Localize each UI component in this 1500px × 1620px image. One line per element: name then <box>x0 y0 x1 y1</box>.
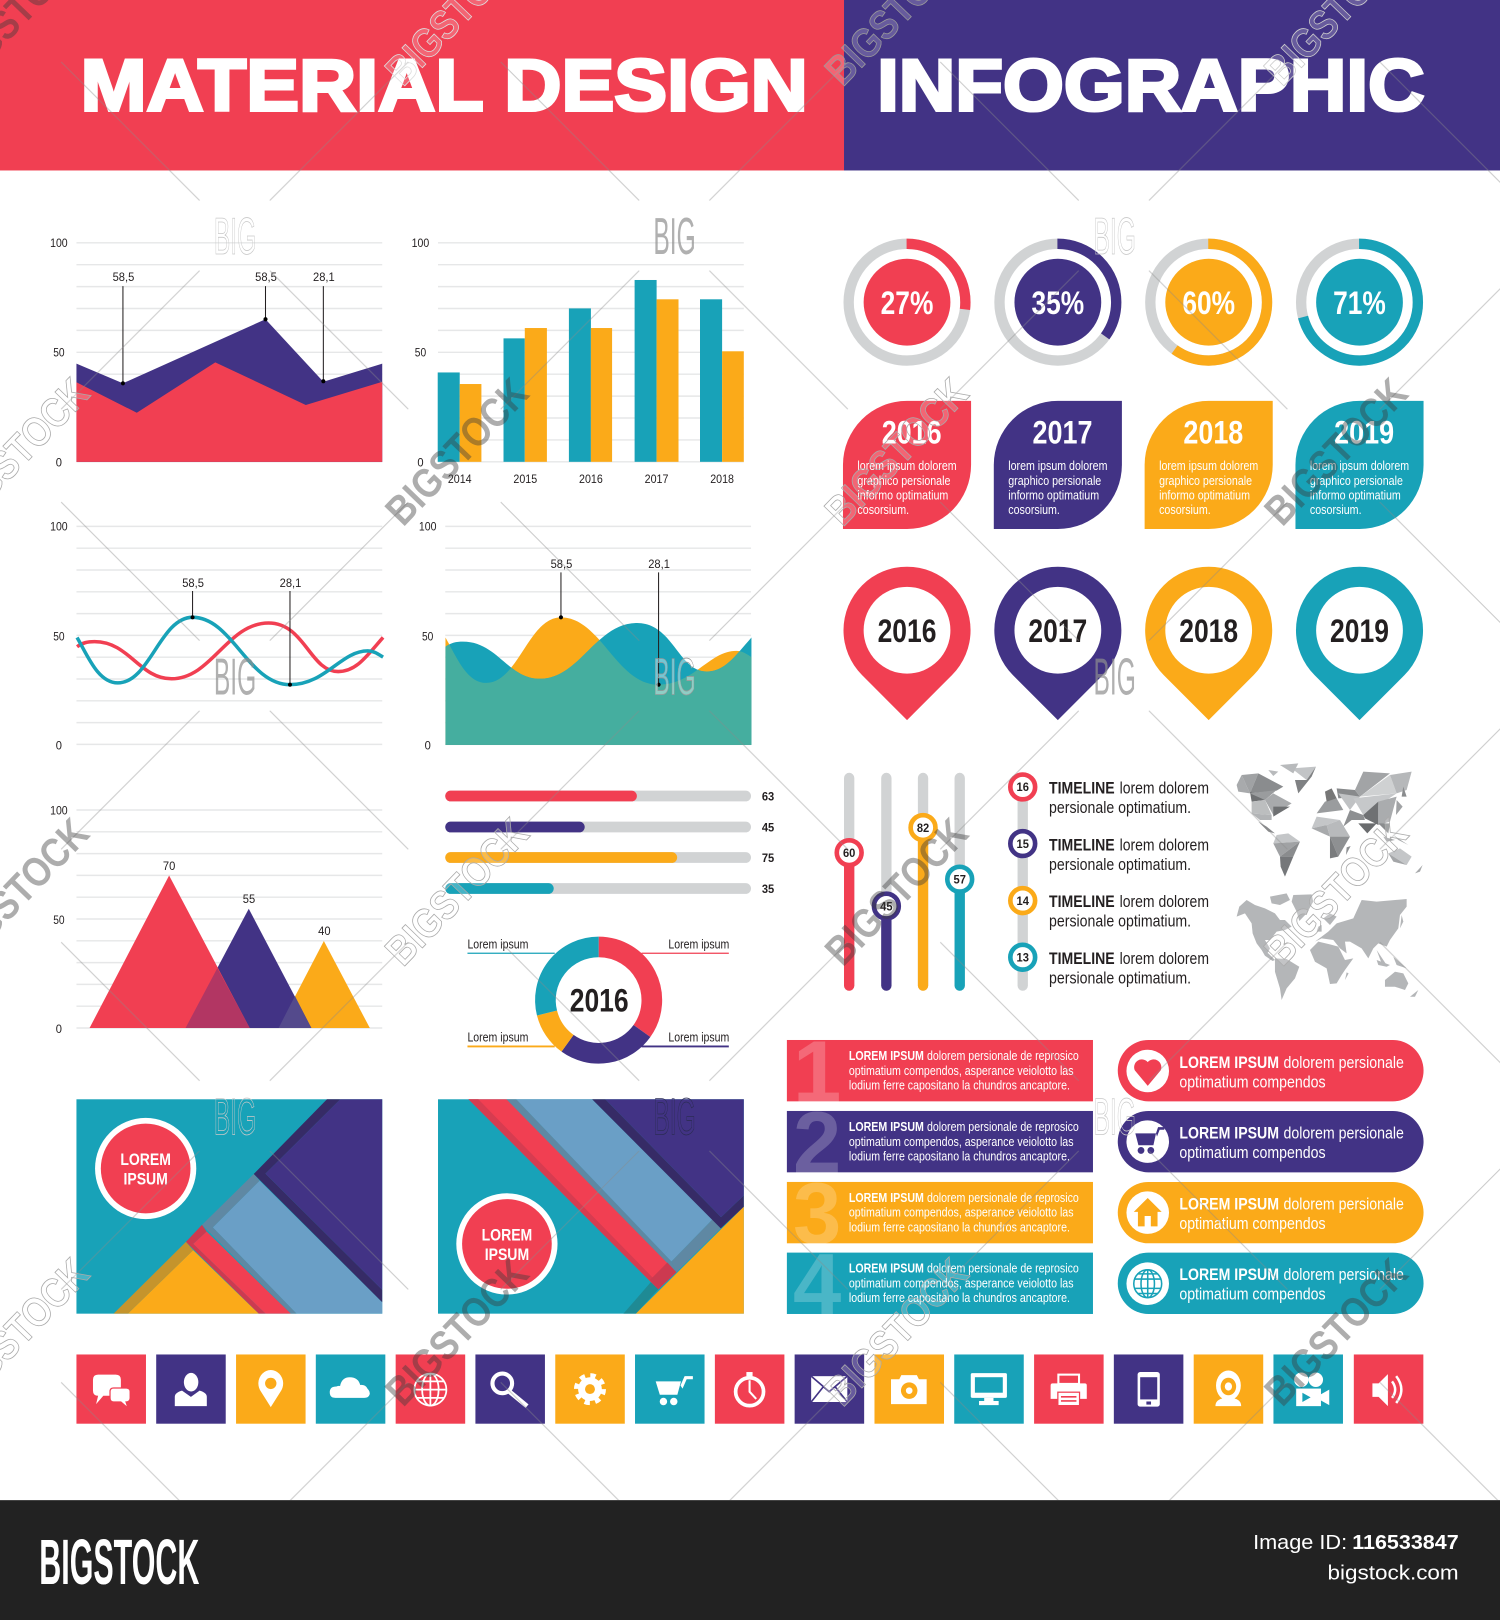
numbered list bars: dolorem persionale de reprosico <box>927 1048 1079 1063</box>
icon: printer <box>1034 1354 1104 1424</box>
bar chart 2014-2018: 2016 <box>579 472 603 486</box>
icon: speaker <box>1354 1354 1423 1424</box>
footer bar: Image ID: <box>1253 1532 1347 1554</box>
text: BIG <box>1093 647 1136 705</box>
line chart: two waves: 58,5 <box>182 576 204 590</box>
triangle chart: 100 <box>50 803 68 817</box>
numbered list bars <box>787 1023 1093 1333</box>
map pins 2016-2019: 2016 <box>878 613 936 649</box>
numbered list bars: lodium ferre capositano la chundros ancaptore. <box>849 1219 1070 1234</box>
banner: lorem ipsum left: LOREM <box>120 1150 171 1169</box>
icon pills: optimatium compendos <box>1179 1143 1326 1162</box>
icon pills: LOREM IPSUM <box>1179 1265 1279 1284</box>
vertical sliders: 60 <box>843 846 855 860</box>
progress rings <box>849 244 1418 361</box>
timeline list: lorem dolorem <box>1120 892 1209 911</box>
timeline list: TIMELINE <box>1049 778 1115 797</box>
numbered list bars: 2 <box>793 1094 841 1191</box>
footer bar <box>0 1500 1500 1620</box>
bar chart 2014-2018: 0 <box>417 455 424 469</box>
donut chart 2016: Lorem ipsum <box>668 936 729 951</box>
progress bars: 35 <box>762 882 775 896</box>
stacked wave area chart: 58,5 <box>551 557 572 571</box>
leaf cards 2016-2019: graphico persionale <box>1159 473 1252 488</box>
timeline list: lorem dolorem <box>1120 949 1209 968</box>
progress bars: 75 <box>762 851 775 865</box>
donut chart 2016 <box>467 936 729 1053</box>
icon: camera <box>874 1354 944 1424</box>
title banner: MATERIAL DESIGN <box>81 45 808 127</box>
numbered list bars: LOREM IPSUM <box>849 1048 924 1063</box>
watermark: BIGSTOCK diagonals: BIGSTOCK <box>816 1250 977 1414</box>
timeline list <box>1010 775 1209 988</box>
numbered list bars: optimatium compendos, asperance veiolotto las <box>849 1063 1074 1078</box>
title banner <box>0 0 1500 170</box>
watermark: BIG marks: BIG <box>653 1087 696 1145</box>
timeline list: persionale optimatium. <box>1049 855 1191 874</box>
icon pills: dolorem persionale <box>1283 1194 1404 1213</box>
map pins 2016-2019 <box>843 567 1423 720</box>
progress rings: 27% <box>881 285 933 321</box>
leaf cards 2016-2019: lorem ipsum dolorem <box>1310 458 1409 473</box>
leaf cards 2016-2019: graphico persionale <box>1310 473 1403 488</box>
progress rings: 35% <box>1032 285 1084 321</box>
footer bar: BIGSTOCK <box>39 1526 199 1598</box>
leaf cards 2016-2019: informo optimatium <box>1159 488 1250 503</box>
text: BIG <box>1093 207 1136 265</box>
area chart: purple and red <box>50 236 382 469</box>
watermark: BIGSTOCK diagonals: BIGSTOCK <box>377 810 537 974</box>
leaf cards 2016-2019: lorem ipsum dolorem <box>1159 458 1258 473</box>
timeline list: persionale optimatium. <box>1049 969 1191 988</box>
icon: gear <box>555 1354 625 1424</box>
timeline list: 13 <box>1017 950 1029 964</box>
footer bar: 116533847 <box>1352 1532 1459 1554</box>
icon: stopwatch <box>715 1354 784 1424</box>
numbered list bars: optimatium compendos, asperance veiolotto las <box>849 1205 1074 1220</box>
triangle chart <box>50 803 382 1036</box>
text: BIG <box>1093 1087 1136 1145</box>
watermark: BIGSTOCK diagonals: BIGSTOCK <box>1256 370 1417 534</box>
leaf cards 2016-2019: informo optimatium <box>857 488 948 503</box>
vertical sliders: 82 <box>917 821 929 835</box>
timeline list: persionale optimatium. <box>1049 798 1191 817</box>
numbered list bars: dolorem persionale de reprosico <box>927 1119 1079 1134</box>
leaf cards 2016-2019: cosorsium. <box>1008 502 1060 517</box>
timeline list: TIMELINE <box>1049 949 1115 968</box>
bar chart 2014-2018: 2014 <box>448 472 472 486</box>
icon: cloud <box>316 1354 385 1424</box>
leaf cards 2016-2019: graphico persionale <box>1008 473 1101 488</box>
numbered list bars: dolorem persionale de reprosico <box>927 1190 1079 1205</box>
triangle chart: 0 <box>56 1022 62 1036</box>
icon pills: optimatium compendos <box>1179 1285 1326 1304</box>
map pins 2016-2019: 2018 <box>1179 613 1238 649</box>
stacked wave area chart: 0 <box>425 738 431 752</box>
numbered list bars: LOREM IPSUM <box>849 1190 924 1205</box>
low-poly world map <box>1237 763 1423 877</box>
donut chart 2016: Lorem ipsum <box>668 1029 729 1044</box>
leaf cards 2016-2019: informo optimatium <box>1310 488 1401 503</box>
watermark: BIG marks: BIG <box>214 207 256 265</box>
bar chart 2014-2018: 2018 <box>710 472 734 486</box>
area chart: purple and red: 58,5 <box>255 270 277 284</box>
icon: envelope <box>795 1354 864 1424</box>
numbered list bars: optimatium compendos, asperance veiolotto las <box>849 1275 1074 1290</box>
numbered list bars: 3 <box>793 1165 841 1262</box>
watermark: BIGSTOCK diagonals: BIGSTOCK <box>1256 1250 1417 1414</box>
leaf cards 2016-2019: 2019 <box>1334 415 1394 451</box>
icon: shopping cart <box>635 1354 705 1424</box>
icon: smartphone <box>1114 1354 1183 1424</box>
banner: lorem ipsum left <box>76 1099 382 1314</box>
leaf cards 2016-2019: lorem ipsum dolorem <box>1008 458 1107 473</box>
icon pills: LOREM IPSUM <box>1179 1053 1279 1072</box>
icon: webcam <box>1194 1354 1263 1424</box>
numbered list bars: LOREM IPSUM <box>849 1261 924 1276</box>
numbered list bars: lodium ferre capositano la chundros ancaptore. <box>849 1148 1070 1163</box>
footer bar: bigstock.com <box>1327 1563 1459 1585</box>
stacked wave area chart: 50 <box>422 629 433 643</box>
numbered list bars: lodium ferre capositano la chundros ancaptore. <box>849 1290 1070 1305</box>
watermark: BIGSTOCK diagonals: BIGSTOCK <box>816 810 977 974</box>
leaf cards 2016-2019: lorem ipsum dolorem <box>857 458 957 473</box>
line chart: two waves: 0 <box>56 738 62 752</box>
watermark: BIGSTOCK diagonals: BIGSTOCK <box>377 370 537 534</box>
bar chart 2014-2018: 2017 <box>645 472 668 486</box>
flat grey world map <box>1237 893 1418 1000</box>
line chart: two waves: 28,1 <box>280 576 301 590</box>
icon pills: dolorem persionale <box>1283 1053 1404 1072</box>
numbered list bars: 4 <box>793 1236 841 1333</box>
leaf cards 2016-2019: 2017 <box>1033 415 1092 451</box>
watermark: BIG marks: BIG <box>214 647 256 705</box>
watermark: BIG marks <box>214 207 1136 1145</box>
timeline list: TIMELINE <box>1049 835 1115 854</box>
icon pills <box>1118 1040 1424 1314</box>
line chart: two waves: 100 <box>50 520 68 534</box>
donut chart 2016: Lorem ipsum <box>467 1029 528 1044</box>
leaf cards 2016-2019: cosorsium. <box>1310 502 1362 517</box>
icon: location pin <box>236 1354 306 1424</box>
numbered list bars: optimatium compendos, asperance veiolotto las <box>849 1134 1074 1149</box>
leaf cards 2016-2019: cosorsium. <box>857 502 909 517</box>
progress bars <box>445 789 775 896</box>
vertical sliders <box>837 778 972 986</box>
numbered list bars: dolorem persionale de reprosico <box>927 1261 1079 1276</box>
leaf cards 2016-2019: cosorsium. <box>1159 502 1211 517</box>
leaf cards 2016-2019: 2018 <box>1183 415 1243 451</box>
watermark: BIG marks: BIG <box>214 1087 256 1145</box>
timeline list: lorem dolorem <box>1120 778 1209 797</box>
bar chart 2014-2018: 50 <box>415 346 426 360</box>
icon pills: dolorem persionale <box>1283 1124 1404 1143</box>
progress rings: 60% <box>1182 285 1235 321</box>
line chart: two waves: 50 <box>53 629 65 643</box>
area chart: purple and red: 50 <box>53 346 65 360</box>
timeline list: 15 <box>1017 837 1029 851</box>
icon: monitor <box>954 1354 1024 1424</box>
watermark: BIG marks: BIG <box>653 207 696 265</box>
vertical sliders: 57 <box>954 873 966 887</box>
icon: movie camera <box>1273 1354 1343 1424</box>
map pins 2016-2019: 2019 <box>1330 613 1389 649</box>
area chart: purple and red: 100 <box>50 236 68 250</box>
icon: chat <box>76 1354 146 1424</box>
stacked wave area chart: 100 <box>419 520 437 534</box>
numbered list bars: LOREM IPSUM <box>849 1119 924 1134</box>
banner: lorem ipsum right <box>438 1099 744 1314</box>
triangle chart: 70 <box>163 859 175 873</box>
area chart: purple and red: 58,5 <box>113 270 134 284</box>
icon: user <box>156 1354 226 1424</box>
progress rings: 71% <box>1333 285 1386 321</box>
leaf cards 2016-2019: informo optimatium <box>1008 488 1099 503</box>
icon pills: LOREM IPSUM <box>1179 1124 1279 1143</box>
icon: search <box>475 1354 545 1424</box>
leaf cards 2016-2019: 2016 <box>882 415 942 451</box>
title banner: INFOGRAPHIC <box>877 45 1425 127</box>
progress bars: 63 <box>762 789 775 803</box>
bar chart 2014-2018 <box>412 236 744 486</box>
icon: globe <box>396 1354 465 1424</box>
map pins 2016-2019: 2017 <box>1028 613 1087 649</box>
triangle chart: 40 <box>318 924 331 938</box>
stacked wave area chart <box>419 520 751 752</box>
leaf cards 2016-2019: graphico persionale <box>857 473 950 488</box>
leaf cards 2016-2019 <box>843 401 1424 529</box>
icon pills: optimatium compendos <box>1179 1072 1326 1091</box>
timeline list: lorem dolorem <box>1120 835 1209 854</box>
area chart: purple and red: 28,1 <box>313 270 335 284</box>
timeline list: 14 <box>1017 894 1029 908</box>
icon pills: dolorem persionale <box>1283 1265 1404 1284</box>
bar chart 2014-2018: 2015 <box>513 472 537 486</box>
watermark: BIGSTOCK diagonals: BIGSTOCK <box>1256 810 1417 974</box>
bar chart 2014-2018: 100 <box>412 236 429 250</box>
donut chart 2016: 2016 <box>570 982 629 1018</box>
banner: lorem ipsum right: LOREM <box>482 1225 532 1244</box>
line chart: two waves <box>50 520 383 752</box>
banner: lorem ipsum right: IPSUM <box>485 1245 529 1264</box>
numbered list bars: 1 <box>793 1023 841 1120</box>
triangle chart: 55 <box>243 892 255 906</box>
stacked wave area chart: 28,1 <box>648 557 670 571</box>
watermark: BIG marks: BIG <box>653 647 696 705</box>
timeline list: 16 <box>1017 780 1029 794</box>
watermark: BIGSTOCK diagonals: BIGSTOCK <box>377 1250 537 1414</box>
banner: lorem ipsum left: IPSUM <box>123 1170 168 1189</box>
timeline list: TIMELINE <box>1049 892 1115 911</box>
vertical sliders: 45 <box>880 899 893 913</box>
watermark: BIGSTOCK diagonals: BIGSTOCK <box>816 370 977 534</box>
numbered list bars: lodium ferre capositano la chundros ancaptore. <box>849 1077 1070 1092</box>
icon pills: optimatium compendos <box>1179 1214 1326 1233</box>
triangle chart: 50 <box>53 913 65 927</box>
donut chart 2016: Lorem ipsum <box>467 936 528 951</box>
icon pills: LOREM IPSUM <box>1179 1194 1279 1213</box>
area chart: purple and red: 0 <box>56 455 62 469</box>
progress bars: 45 <box>762 820 775 834</box>
timeline list: persionale optimatium. <box>1049 912 1191 931</box>
